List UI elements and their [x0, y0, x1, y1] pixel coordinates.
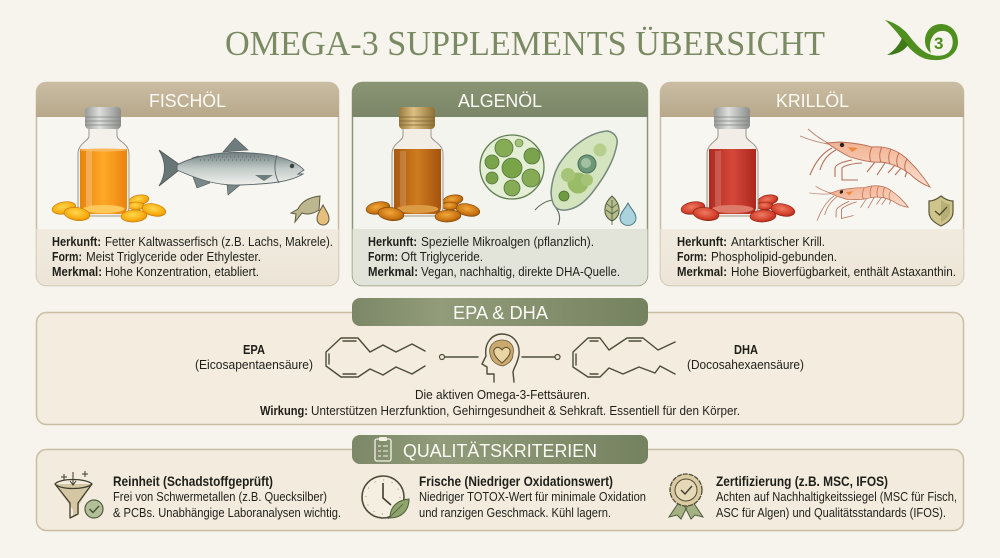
label: DHA: [687, 342, 804, 372]
text: effect: Wirkung:: [260, 403, 308, 418]
text: Fischöl facts: Form:: [52, 249, 82, 264]
icon: logo: 3: [934, 34, 943, 53]
icon: algae oil capsules and bottle: [365, 107, 481, 223]
icon: fish oil capsules and bottle: [51, 107, 167, 223]
text: Reinheit: Frei von Schwermetallen (z.B. Quecksilber): [113, 489, 327, 504]
text: Frische: Niedriger TOTOX-Wert für minimale Oxidation: [419, 489, 646, 504]
text: effect: Die aktiven Omega-3-Fettsäuren.: [415, 387, 590, 402]
heading: Fischöl: FISCHÖL: [149, 91, 226, 111]
text: Krillöl facts: Merkmal:: [677, 264, 727, 279]
panel: EPA & DHA: [36, 298, 964, 424]
text: Frische: und ranzigen Geschmack. Kühl lagern.: [419, 505, 611, 520]
text: Reinheit: [113, 473, 341, 520]
text: Algenöl facts: Form:: [368, 249, 398, 264]
icon: clock with leaf: [362, 476, 409, 519]
icon: certification badge: [669, 474, 703, 519]
text: Algenöl facts: Vegan, nachhaltig, direkte DHA-Quelle.: [421, 264, 620, 279]
title: OMEGA-3 SUPPLEMENTS ÜBERSICHT: [225, 24, 825, 63]
heading pill: EPA & DHA: [352, 298, 648, 326]
text: Algenöl facts: Spezielle Mikroalgen (pflanzlich).: [421, 234, 594, 249]
text: Frische: [419, 473, 646, 520]
panel: Qualitätskriterien: [36, 435, 964, 530]
chart: DHA molecule: [573, 338, 675, 377]
icon: microalga cell: [535, 131, 617, 225]
icon: algae cells circle: [480, 135, 544, 199]
heading: Fischöl: [36, 82, 339, 117]
text: Fischöl facts: [52, 234, 333, 279]
panel: Krillöl: [660, 82, 964, 286]
text: Fischöl facts: Hohe Konzentration, etabliert.: [105, 264, 259, 279]
icon: small fish and drop: [291, 196, 329, 225]
text: Zertifizierung: Achten auf Nachhaltigkeitssiegel (MSC für Fisch,: [716, 489, 957, 504]
text: Krillöl facts: Form:: [677, 249, 707, 264]
text: Krillöl facts: Herkunft:: [677, 234, 727, 249]
text: Frische: Frische (Niedriger Oxidationswert): [419, 473, 613, 489]
text: Algenöl facts: Herkunft:: [368, 234, 417, 249]
heading: Algenöl: [352, 82, 648, 117]
icon: krill oil capsules and bottle: [680, 107, 796, 223]
text: Zertifizierung: Zertifizierung (z.B. MSC, IFOS): [716, 473, 888, 489]
icon: salmon: [159, 138, 304, 195]
text: Fischöl facts: Fetter Kaltwasserfisch (z.B. Lachs, Makrele).: [105, 234, 333, 249]
icon: head with heart: [440, 334, 560, 382]
icon: logo: [885, 20, 958, 60]
text: Algenöl facts: Oft Triglyceride.: [401, 249, 483, 264]
text: Krillöl facts: Antarktischer Krill.: [731, 234, 825, 249]
heading pill: Qualitätskriterien: QUALITÄTSKRITERIEN: [403, 441, 597, 461]
text: effect: [260, 387, 740, 418]
text: Reinheit: Reinheit (Schadstoffgeprüft): [113, 473, 273, 489]
text: Krillöl facts: Phospholipid-gebunden.: [711, 249, 837, 264]
text: Fischöl facts: Herkunft:: [52, 234, 101, 249]
label: EPA: (Eicosapentaensäure): [195, 357, 313, 372]
text: Reinheit: & PCBs. Unabhängige Laboranalysen wichtig.: [113, 505, 341, 520]
heading pill: EPA & DHA: EPA & DHA: [453, 303, 548, 323]
heading: Krillöl: [660, 82, 964, 117]
panel: Fischöl: [36, 82, 339, 286]
text: Algenöl facts: Merkmal:: [368, 264, 418, 279]
heading: Algenöl: ALGENÖL: [458, 91, 542, 111]
text: effect: Unterstützen Herzfunktion, Gehirngesundheit & Sehkraft. Essentiell für den Körper.: [311, 403, 740, 418]
heading pill: Qualitätskriterien: [352, 435, 648, 464]
label: DHA: DHA: [734, 342, 759, 357]
text: Fischöl facts: Merkmal:: [52, 264, 102, 279]
heading: Krillöl: KRILLÖL: [776, 91, 849, 111]
icon: krill pair: [800, 129, 930, 232]
chart: EPA molecule: [326, 338, 425, 377]
label: EPA: EPA: [243, 342, 266, 357]
icon: shield: [929, 196, 953, 226]
label: EPA: [195, 342, 313, 372]
icon: funnel with check: [55, 471, 103, 518]
label: DHA: (Docosahexaensäure): [687, 357, 804, 372]
text: Algenöl facts: [368, 234, 620, 279]
panel: Algenöl: [352, 82, 648, 286]
text: Fischöl facts: Meist Triglyceride oder Ethylester.: [86, 249, 261, 264]
text: Zertifizierung: [716, 473, 957, 520]
text: Zertifizierung: ASC für Algen) und Qualitätsstandards (IFOS).: [716, 505, 946, 520]
icon: leaf and drop: [605, 196, 636, 226]
text: Krillöl facts: [677, 234, 956, 279]
text: Krillöl facts: Hohe Bioverfügbarkeit, enthält Astaxanthin.: [731, 264, 956, 279]
